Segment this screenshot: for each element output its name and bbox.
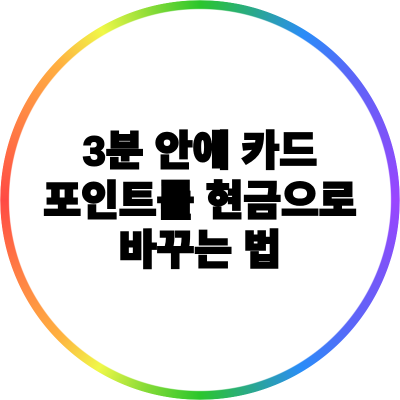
title line 2: 포인트를 현금으로 <box>43 178 357 224</box>
title line 1: 3분 안에 카드 <box>83 128 317 174</box>
title line 3: 바꾸는 법 <box>119 227 281 273</box>
title <box>43 128 357 273</box>
